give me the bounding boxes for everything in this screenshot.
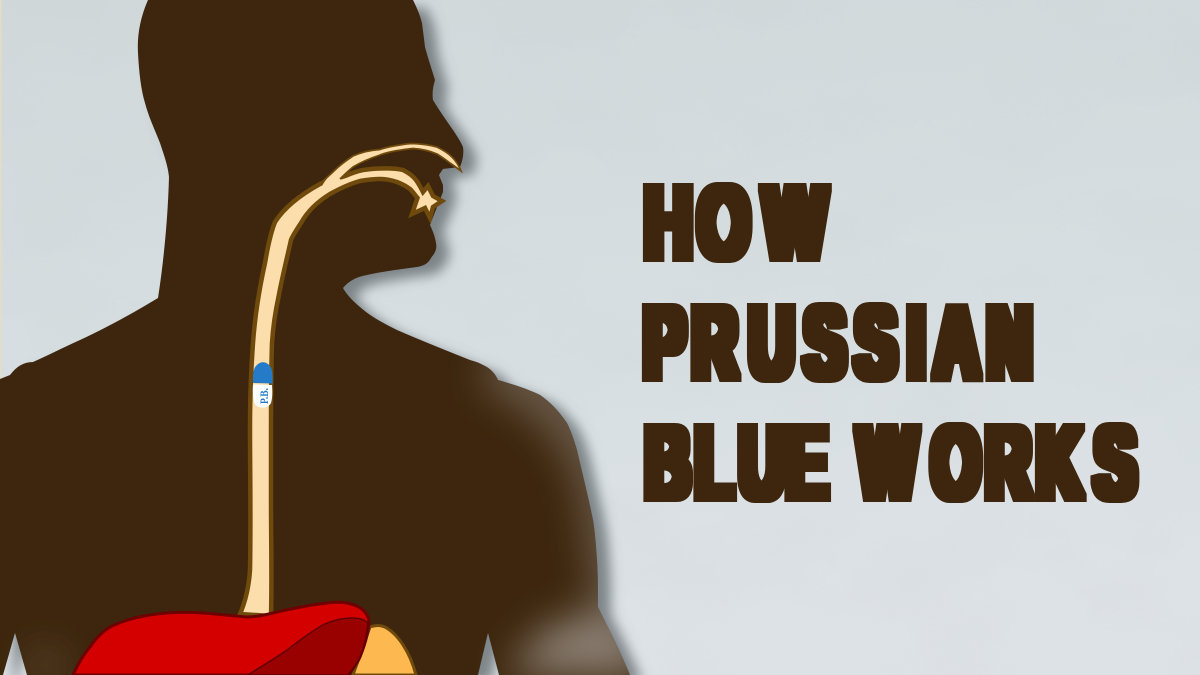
esophagus tube and mouth branch [240,168,442,616]
human silhouette [0,0,640,675]
esophagus and nasal passages [240,144,461,616]
liver [73,602,369,675]
nasal branch fill [322,144,461,190]
liver dark lobe [248,618,368,675]
title line 3: BLUE WORKS [645,405,1136,520]
capsule blue half [253,362,273,384]
title line 1: HOW [644,166,826,281]
stomach [353,626,416,675]
capsule label: P.B. [257,388,271,404]
nasal branch outline [320,144,461,184]
liver main lobe [73,602,369,675]
capsule: P.B. pill [253,362,273,408]
title [644,166,1136,520]
capsule white half [253,384,272,408]
title line 2: PRUSSIAN [644,285,1032,400]
